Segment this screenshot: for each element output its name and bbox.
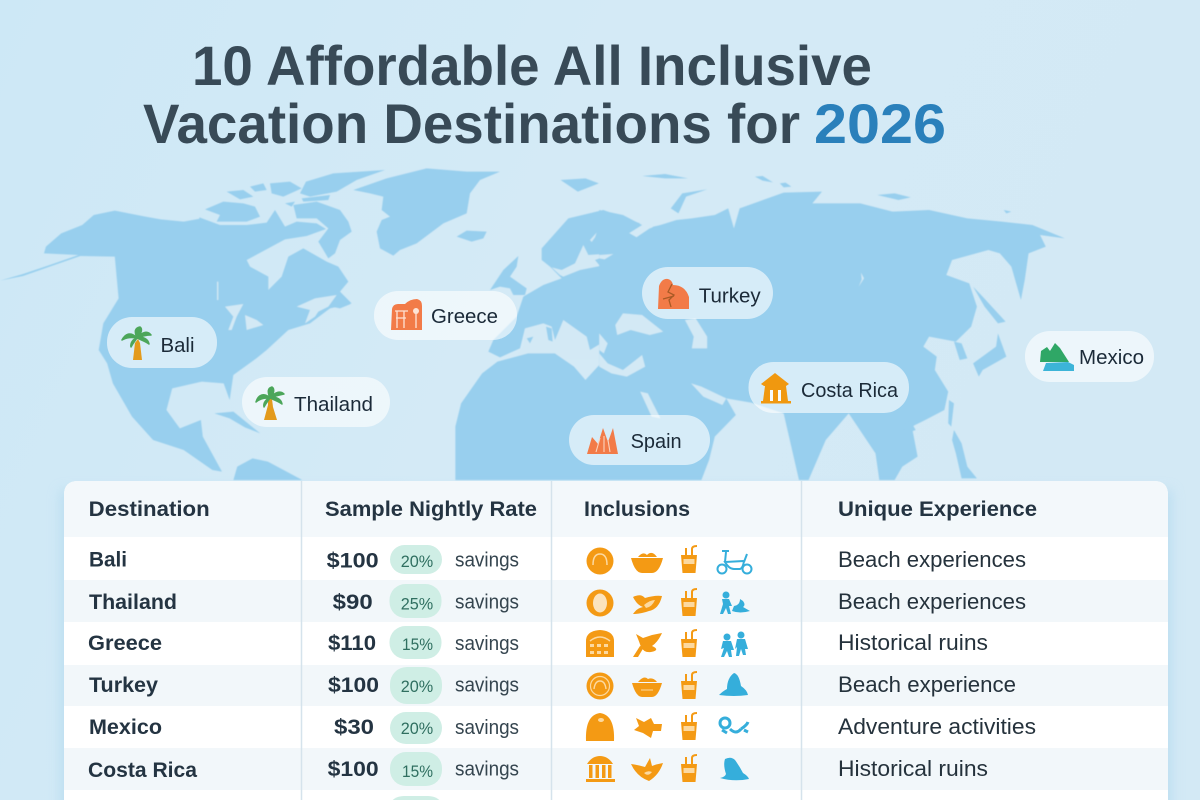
table header: Inclusions	[584, 498, 690, 521]
table header: Unique Experience	[838, 498, 1037, 521]
row: Costa Rica: savings	[455, 759, 519, 781]
americas west	[0, 178, 599, 480]
row: Bali: savings	[455, 550, 519, 572]
row: Mexico: Mexico	[89, 716, 162, 739]
row: Thailand: 25%	[401, 595, 433, 614]
title: 10 Affordable All Inclusive	[192, 34, 872, 97]
row 1 icons	[586, 546, 752, 574]
row: Turkey: 20%	[401, 677, 433, 696]
canada, greenland	[199, 168, 500, 400]
row: Costa Rica: 15%	[402, 762, 433, 781]
map label: Turkey	[642, 267, 773, 319]
map label: Costa Rica: Costa Rica	[801, 379, 899, 402]
row: Greece: Greece	[88, 632, 162, 655]
row: Greece: savings	[455, 633, 519, 655]
icon: rock spires	[587, 428, 618, 454]
eurasia	[599, 174, 1065, 480]
map label: Greece: Greece	[431, 305, 498, 328]
row: Mexico: $30	[334, 716, 374, 739]
icon: palm tree	[122, 327, 151, 360]
row: Turkey: Turkey	[89, 674, 158, 697]
map label: Bali: Bali	[160, 334, 194, 357]
row 3 icons	[586, 630, 748, 657]
row: Bali: 20%	[401, 552, 433, 571]
row: Greece: 15%	[402, 635, 433, 654]
row: Greece: $110	[328, 632, 376, 655]
row: Turkey: $100	[328, 674, 379, 697]
africa	[455, 353, 601, 480]
row: Mexico	[89, 712, 1036, 744]
row: Mexico: Adventure activities	[838, 714, 1036, 739]
row: Bali	[89, 545, 1026, 574]
table header: Destination	[89, 498, 210, 521]
row: Greece: Historical ruins	[838, 630, 988, 655]
partial pill of cropped row	[390, 796, 442, 800]
row: Costa Rica: Costa Rica	[88, 759, 197, 782]
row: Greece	[88, 626, 988, 659]
row: Thailand: $90	[333, 591, 373, 614]
row: Bali: Beach experiences	[838, 547, 1026, 572]
map label: Spain	[569, 415, 710, 465]
icons: inclusions	[586, 546, 752, 782]
row: Mexico: 20%	[401, 719, 433, 738]
europe	[488, 210, 693, 360]
map label: Greece	[374, 291, 517, 340]
panel: destination table	[64, 481, 1168, 800]
map label: Mexico: Mexico	[1079, 346, 1144, 369]
row: Costa Rica	[88, 752, 988, 786]
map label: Costa Rica	[748, 362, 909, 413]
row: Thailand	[89, 584, 1026, 618]
title	[143, 34, 946, 155]
row: Bali: Bali	[89, 549, 127, 572]
row: Turkey: savings	[455, 675, 519, 697]
row 5 icons	[586, 713, 748, 741]
icon: ruins	[391, 299, 422, 330]
row: Costa Rica: $100	[328, 758, 379, 781]
map label: Spain: Spain	[631, 430, 682, 453]
table header: Sample Nightly Rate	[325, 498, 537, 521]
row: Thailand: Beach experiences	[838, 589, 1026, 614]
row: Costa Rica: Historical ruins	[838, 756, 988, 781]
table header	[89, 498, 1037, 521]
row 2 icons	[586, 589, 750, 616]
row: Turkey	[89, 667, 1016, 704]
map label: Turkey: Turkey	[699, 285, 761, 308]
title: 2026	[814, 92, 946, 155]
icon: palm tree	[256, 387, 284, 420]
icon: island	[1040, 343, 1074, 371]
map label: Thailand: Thailand	[294, 393, 373, 416]
row: Thailand: savings	[455, 591, 519, 613]
world map	[0, 168, 1065, 480]
row: Turkey: Beach experience	[838, 672, 1016, 697]
row 6 icons	[586, 755, 749, 782]
icon: temple	[761, 373, 791, 404]
map label: Bali	[107, 317, 217, 368]
row: Mexico: savings	[455, 717, 519, 739]
row 4 icons	[586, 672, 748, 700]
icon: rock	[658, 279, 689, 309]
title: Vacation Destinations for	[143, 92, 800, 155]
map label: Thailand	[242, 377, 390, 427]
map label: Mexico	[1025, 331, 1154, 382]
row: Thailand: Thailand	[89, 591, 177, 614]
row: Bali: $100	[327, 550, 379, 573]
